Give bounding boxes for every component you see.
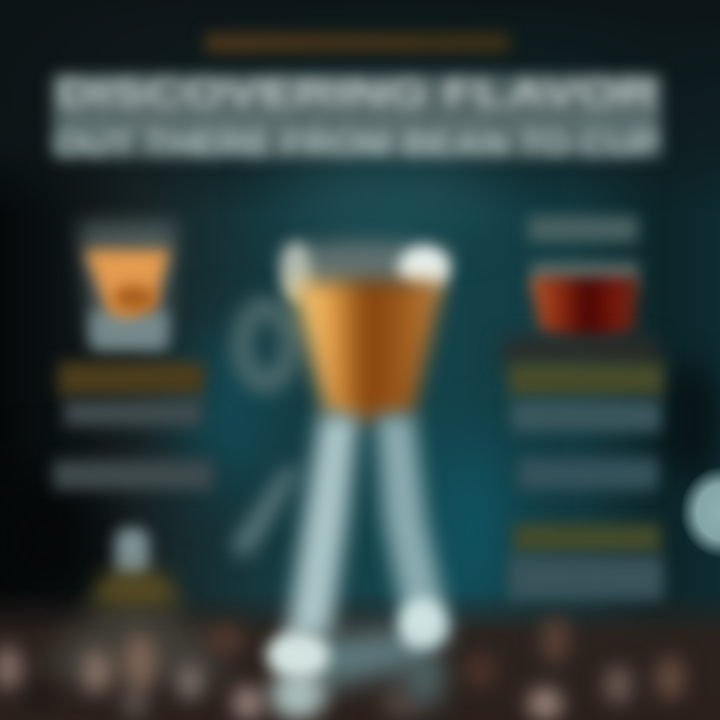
left text block: citrus and honey notes (57, 468, 207, 485)
glass handle (242, 307, 290, 383)
eyebrow heading: FLAVOR & COFFEE GUIDE (207, 33, 507, 53)
right text block (511, 400, 661, 490)
right subheading: AROMA (517, 530, 655, 550)
left heading (58, 362, 204, 396)
center: large glass (230, 241, 452, 720)
small flask icon (88, 528, 182, 605)
right heading: DEEP BODY (512, 367, 660, 392)
base right lower glow (407, 652, 443, 708)
base lower glow (270, 670, 326, 720)
glass liquid (290, 281, 444, 421)
right top label: DARK ROAST (534, 222, 632, 239)
base connector (300, 625, 435, 690)
beans (0, 590, 684, 720)
left text block: bright and floral (70, 406, 194, 423)
title: OUT THERE FROM BEAN TO CUP (54, 123, 660, 164)
coffee beans strip (0, 590, 720, 720)
icon: small glass (78, 222, 178, 350)
stem left (286, 415, 358, 640)
stem right (376, 415, 452, 640)
right panel (500, 216, 720, 600)
icon: red glass (500, 262, 665, 365)
left panel: small glass (53, 222, 213, 605)
right lower text (508, 556, 664, 600)
title: DISCOVERING FLAVOR (57, 71, 657, 115)
side tube (230, 465, 302, 556)
title: THE DIFFERENCE IN EVERY CUP YOU BREW (62, 110, 652, 132)
right top label (528, 216, 638, 242)
left heading: LIGHT ROAST (62, 366, 198, 391)
title (52, 71, 662, 164)
right text block: cocoa and spice (524, 467, 652, 484)
base highlight right (399, 598, 445, 652)
glass rim (278, 241, 450, 302)
right lower text: roasted and warm (516, 569, 656, 586)
icon: pale badge at right edge (678, 466, 720, 558)
left text block (53, 400, 213, 490)
small flask icon: ORIGIN (110, 583, 160, 599)
right text block: rich and smoky (517, 407, 655, 424)
base highlight left (266, 631, 330, 679)
right heading (508, 363, 664, 397)
right subheading (513, 524, 661, 554)
